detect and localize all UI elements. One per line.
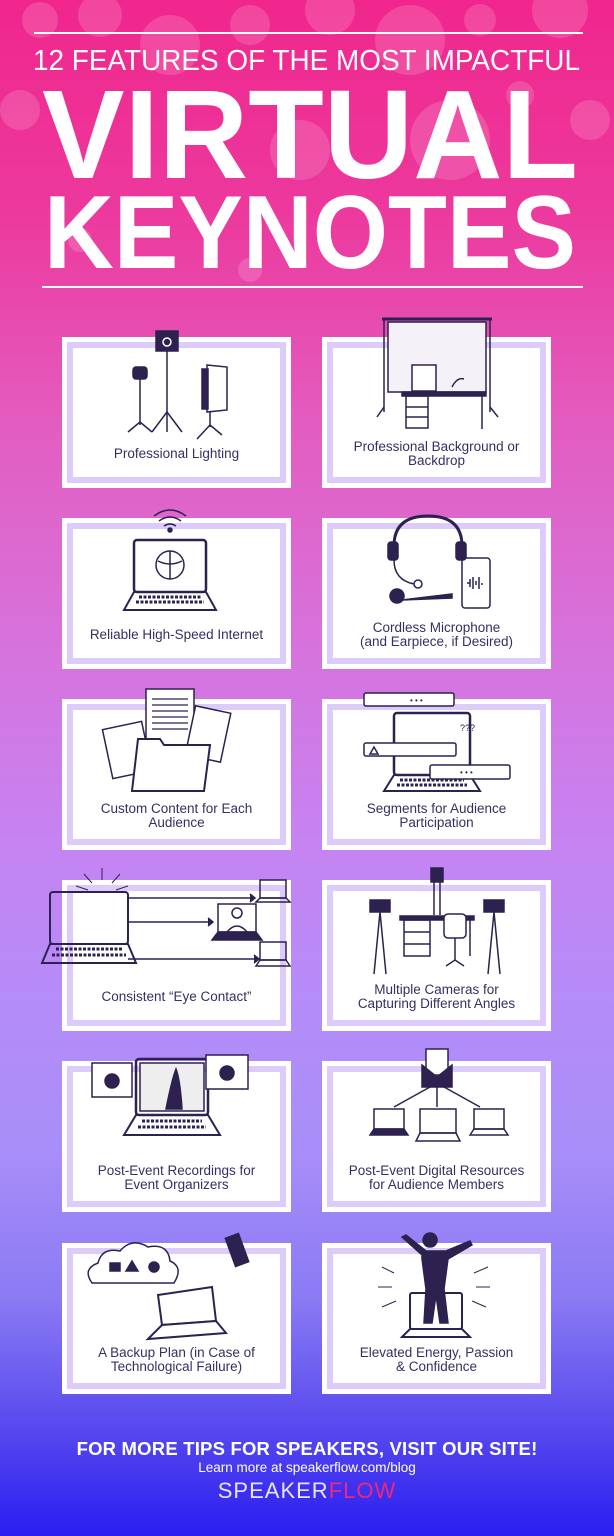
caption: for Audience Members [369, 1177, 504, 1192]
caption: Post-Event Digital Resources [349, 1163, 524, 1178]
caption: & Confidence [396, 1359, 477, 1374]
caption [98, 1163, 256, 1192]
caption: Custom Content for Each [101, 801, 252, 816]
footer link: Learn more at speakerflow.com/blog [198, 1460, 416, 1475]
caption [360, 620, 513, 649]
icon: lights [128, 330, 228, 440]
card 11: Backup plan [62, 1243, 291, 1394]
caption: Professional Background or [354, 439, 519, 454]
title: VIRTUAL [42, 64, 578, 205]
card 4: Microphone [322, 518, 551, 669]
header bubbles [0, 0, 610, 282]
icon: documents folder [102, 688, 232, 792]
caption: Multiple Cameras for [374, 982, 499, 997]
caption [358, 982, 515, 1011]
caption: Professional Lighting [114, 446, 239, 461]
card 7: Eye contact [62, 880, 291, 1031]
caption: A Backup Plan (in Case of [98, 1345, 255, 1360]
caption: Backdrop [408, 453, 465, 468]
footer [77, 1438, 537, 1503]
icon: backdrop [376, 318, 498, 429]
icon: video laptop [91, 1054, 249, 1136]
caption: Consistent “Eye Contact” [101, 989, 252, 1004]
icon: cloud usb laptop [87, 1232, 250, 1340]
title: KEYNOTES [44, 175, 576, 291]
card 5: Custom Content [62, 699, 291, 850]
icon: laptop chats: ??? [460, 723, 475, 733]
logo: SPEAKERFLOW [218, 1478, 396, 1503]
caption [101, 801, 252, 830]
caption [98, 1345, 255, 1374]
caption [367, 801, 506, 830]
card 6: Audience participation [322, 699, 551, 850]
icon: person laptop [378, 1232, 490, 1338]
title: 12 FEATURES OF THE MOST IMPACTFUL [33, 45, 580, 77]
card 10: Digital resources [322, 1061, 551, 1212]
caption [354, 439, 520, 468]
caption: Cordless Microphone [373, 620, 500, 635]
caption: Technological Failure) [111, 1359, 242, 1374]
icon: envelope laptops [368, 1048, 510, 1142]
caption: Audience [148, 815, 205, 830]
caption: Elevated Energy, Passion [360, 1345, 513, 1360]
icon: cameras desk [369, 867, 505, 974]
card 12: Energy [322, 1243, 551, 1394]
card 9: Recordings [62, 1061, 291, 1212]
card 1: Professional Lighting [62, 337, 291, 488]
caption: Segments for Audience [367, 801, 506, 816]
caption [360, 1345, 513, 1374]
icon: laptops arrows [40, 868, 292, 967]
icon: laptop chats: • • • [460, 768, 473, 777]
title [33, 32, 583, 291]
card 2: Background [322, 337, 551, 488]
caption [349, 1163, 524, 1192]
caption: Post-Event Recordings for [98, 1163, 255, 1178]
icon: laptop chats [363, 692, 511, 792]
caption: Capturing Different Angles [358, 996, 515, 1011]
caption: Participation [399, 815, 474, 830]
caption: Event Organizers [124, 1177, 229, 1192]
card 3: Internet [62, 518, 291, 669]
card 8: Multiple cameras [322, 880, 551, 1031]
footer heading: FOR MORE TIPS FOR SPEAKERS, VISIT OUR SITE! [77, 1438, 537, 1459]
caption: (and Earpiece, if Desired) [360, 634, 513, 649]
icon: headset mic phone [387, 514, 491, 609]
caption: Reliable High-Speed Internet [90, 627, 263, 642]
icon: laptop chats: • • • [410, 696, 423, 705]
icon: laptop wifi [122, 509, 218, 611]
